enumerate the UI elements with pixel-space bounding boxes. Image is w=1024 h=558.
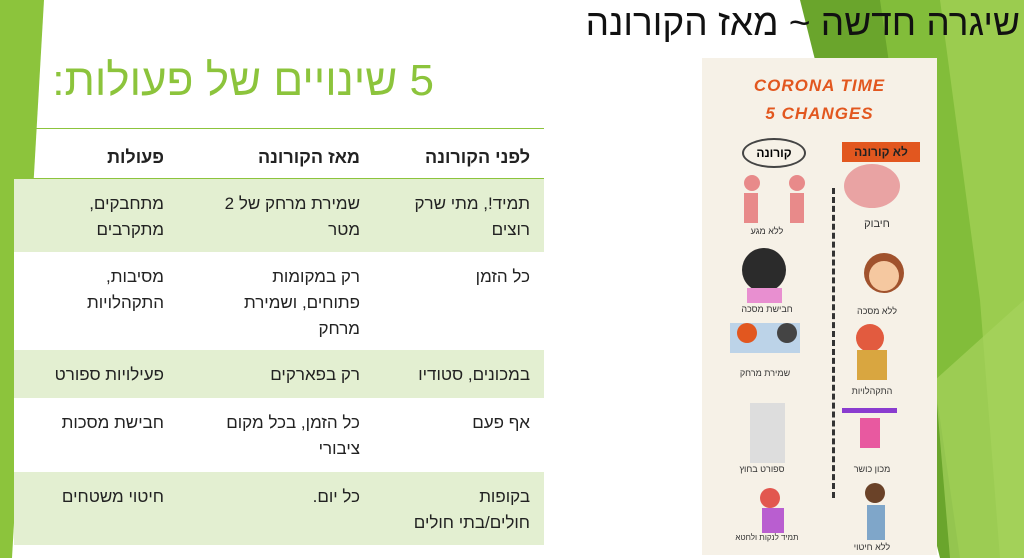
poster: חבישת מסכה (741, 304, 793, 314)
poster labels: קורונה (756, 146, 792, 160)
row 5: כל יום. (313, 487, 360, 506)
row 3: פעילויות ספורט (55, 365, 164, 384)
row 1: שמירת מרחק של 2 מטר (225, 194, 360, 239)
poster: התקהלויות (852, 386, 892, 396)
table header: פעולות (107, 147, 164, 167)
row 5 (14, 472, 544, 545)
row 5: חיטוי משטחים (62, 487, 164, 506)
row 3: במכונים, סטודיו (418, 365, 530, 384)
poster title: CORONA TIME (754, 76, 885, 95)
poster illustrations (730, 164, 904, 540)
poster: ללא מגע (751, 226, 783, 236)
table (14, 128, 544, 545)
poster: לא קורונה (854, 145, 908, 159)
title: top right: שיגרה חדשה ~ מאז הקורונה (586, 2, 1020, 43)
row 3: רק בפארקים (270, 365, 360, 384)
row 2: כל הזמן (476, 267, 530, 286)
poster labels (742, 138, 806, 168)
table header: לפני הקורונה (425, 147, 530, 167)
row 4: חבישת מסכות (62, 413, 164, 432)
table header (14, 128, 544, 179)
row 5: בקופות חולים/בתי חולים (414, 487, 530, 532)
poster: מכון כושר (854, 464, 890, 474)
poster: שמירת מרחק (740, 368, 790, 378)
row 1: תמיד!, מתי שרק רוצים (414, 194, 530, 239)
heading: green: 5 שינויים של פעולות: (52, 56, 434, 105)
poster: תמיד לנקות ולחטא (735, 533, 799, 542)
poster title: 5 CHANGES (765, 104, 874, 123)
poster title (754, 76, 885, 123)
row 4: אף פעם (472, 413, 530, 432)
row 4 (14, 398, 544, 472)
table header: מאז הקורונה (258, 147, 360, 167)
row 2 (14, 252, 544, 350)
poster: חיבוק (864, 218, 890, 230)
row 2: מסיבות, התקהלויות (87, 267, 164, 312)
poster: ללא חיטוי (854, 542, 890, 552)
row 2: רק במקומות פתוחים, ושמירת מרחק (244, 267, 360, 338)
poster: ללא מסכה (857, 306, 897, 316)
row 4: כל הזמן, בכל מקום ציבורי (226, 413, 360, 458)
row 3 (14, 350, 544, 398)
row 1: מתחבקים, מתקרבים (89, 194, 164, 239)
dashed divider (832, 188, 835, 498)
poster: ספורט בחוץ (739, 464, 784, 474)
row 1 (14, 179, 544, 252)
poster (702, 58, 937, 555)
